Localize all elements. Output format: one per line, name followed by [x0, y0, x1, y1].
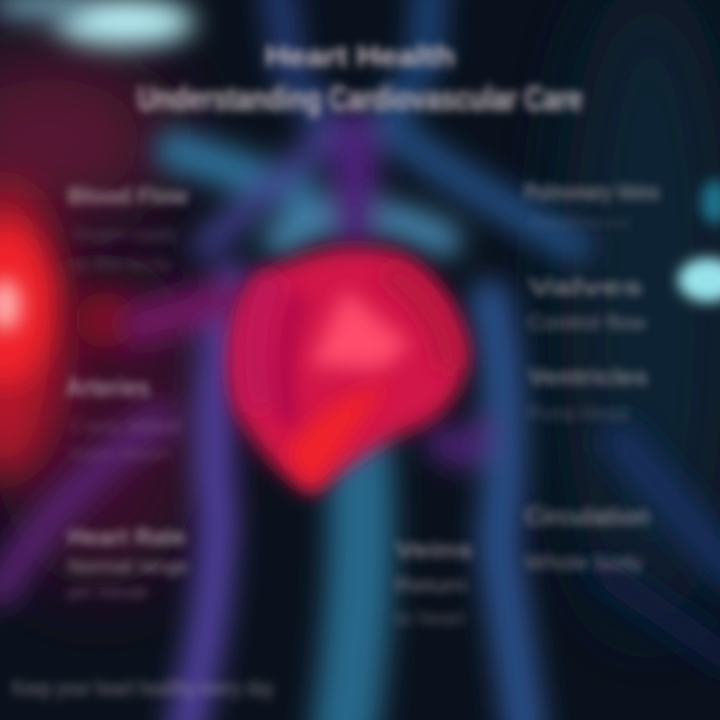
left red glow [0, 50, 210, 590]
heart highlight [310, 290, 410, 370]
text block: right 4: Circulation [525, 501, 650, 531]
text block: left 1: Oxygen supply [72, 224, 177, 244]
text block: right 4 [525, 501, 650, 575]
text block: left 2 [66, 372, 180, 464]
text block: right 4: Whole body [525, 550, 643, 575]
text block: left 1: Blood Flow [68, 183, 188, 210]
heart lower chamber [285, 385, 385, 490]
text block: left 2: Arteries [66, 372, 150, 402]
left text blocks [66, 183, 188, 602]
text block: left 3 [68, 524, 188, 602]
right text blocks [395, 179, 660, 630]
text block: left 2: from heart [70, 444, 170, 464]
text block: right 2: Control flow [528, 310, 646, 335]
title: Understanding Cardiovascular Care [138, 80, 582, 118]
text block: right 2 [528, 274, 646, 335]
text block: right 1: Return blood [530, 215, 630, 232]
text block: left 3: Heart Rate [68, 524, 186, 551]
heart shading [284, 295, 300, 425]
footer text: Keep your heart healthy every day [12, 675, 274, 702]
text block: center lower: Return [395, 575, 467, 597]
heart dark lobes [256, 275, 275, 410]
text block: left 3: Normal range [68, 556, 188, 578]
text block: left 3: per minute [68, 582, 148, 602]
cyan light blobs [0, 0, 720, 302]
text block: left 1 [68, 183, 188, 274]
heart [228, 247, 468, 495]
text block: right 3: Ventricles [528, 364, 648, 391]
text block: left 2: Carry blood [70, 416, 180, 436]
text block: right 3 [528, 364, 648, 425]
text block: center lower [395, 537, 473, 630]
text block: center lower: Veins [395, 537, 473, 564]
text block: right 3: Pump blood [528, 403, 628, 425]
text block: center lower: to heart [395, 608, 465, 630]
text block: left 1: to the body [72, 254, 172, 274]
title [138, 40, 582, 118]
text block: right 1: Pulmonary Veins [525, 179, 660, 206]
text block: right 2: Valves [528, 274, 643, 301]
text block: right 1 [525, 179, 660, 232]
title: Heart Health [265, 40, 455, 73]
